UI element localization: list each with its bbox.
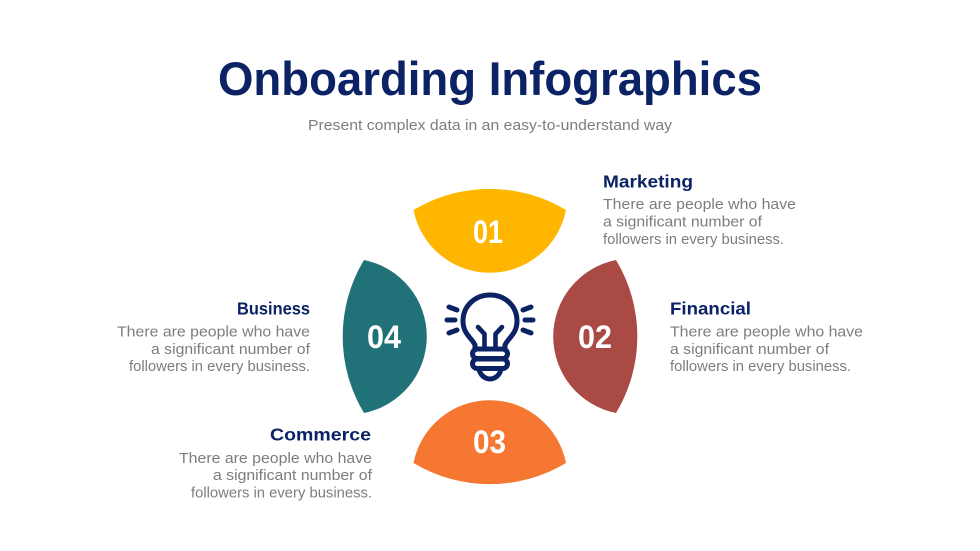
text block: Business: Business bbox=[237, 298, 310, 318]
petal 01: 01 bbox=[473, 214, 503, 250]
subtitle: Present complex data in an easy-to-understand way bbox=[308, 118, 673, 134]
text block: Marketing bbox=[603, 172, 796, 248]
text block: Financial: There are people who have bbox=[670, 324, 863, 340]
text block: Commerce: followers in every business. bbox=[191, 486, 372, 502]
title: Onboarding Infographics bbox=[218, 53, 762, 106]
petal 02: 02 bbox=[578, 319, 612, 355]
text block: Commerce: There are people who have bbox=[179, 451, 372, 467]
text block: Business: followers in every business. bbox=[129, 359, 310, 375]
text block: Business: a significant number of bbox=[151, 342, 311, 358]
text block: Marketing: There are people who have bbox=[603, 197, 796, 213]
petal 04: 04 bbox=[367, 319, 401, 355]
petal 04 bbox=[343, 260, 427, 413]
petal 01 bbox=[414, 189, 566, 273]
petal 03: 03 bbox=[473, 424, 506, 460]
text block: Commerce: a significant number of bbox=[213, 468, 373, 484]
text block: Marketing: a significant number of bbox=[603, 214, 763, 230]
text block: Financial: followers in every business. bbox=[670, 359, 851, 375]
text block: Marketing: Marketing bbox=[603, 172, 693, 192]
text block: Commerce bbox=[179, 424, 373, 502]
text block: Financial bbox=[670, 298, 863, 375]
text block: Financial: a significant number of bbox=[670, 342, 830, 358]
text block: Business: There are people who have bbox=[117, 324, 310, 340]
text block: Marketing: followers in every business. bbox=[603, 232, 784, 248]
petal 02 bbox=[553, 260, 637, 413]
text block: Commerce: Commerce bbox=[270, 424, 371, 444]
icon: light bulb bbox=[447, 295, 533, 379]
text block: Business bbox=[117, 298, 311, 375]
petal 03 bbox=[414, 400, 566, 484]
text block: Financial: Financial bbox=[670, 298, 751, 318]
